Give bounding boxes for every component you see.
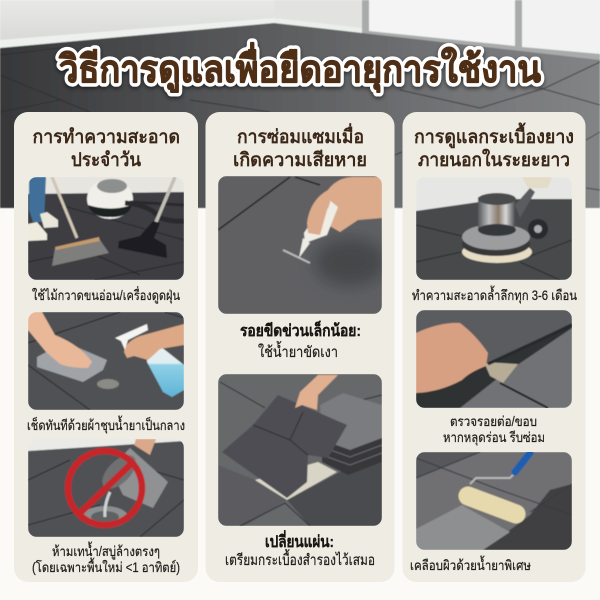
heading: long-term care: การดูแลกระเบื้องยาง: [414, 122, 574, 149]
photo: broom and vacuum: [28, 177, 184, 280]
caption: warning: (โดยเฉพาะพื้นใหม่ <1 อาทิตย์): [32, 557, 180, 575]
caption: scratches: ใช้น้ำยาขัดเงา: [258, 341, 338, 361]
heading: repair: เกิดความเสียหาย: [233, 149, 367, 171]
caption: warning: ห้ามเทน้ำ/สบู่ล้างตรงๆ: [52, 541, 160, 560]
heading: daily cleaning: [32, 127, 180, 171]
caption: coating: เคลือบผิวด้วยน้ำยาพิเศษ: [410, 555, 531, 573]
photo: floor polishing machine: [416, 177, 572, 280]
heading: daily cleaning: การทำความสะอาด: [32, 127, 180, 148]
heading: repair: [233, 123, 367, 171]
caption: wipe: เช็ดทันทีด้วยผ้าชุบน้ำยาเป็นกลาง: [27, 415, 185, 434]
panel: long-term care: [402, 112, 586, 582]
heading: long-term care: [414, 122, 574, 171]
caption: scratches: [240, 319, 361, 361]
panel: daily cleaning: [14, 112, 198, 582]
caption: replace: เตรียมกระเบื้องสำรองไว้เสมอ: [225, 549, 375, 569]
background photo: room with rubber floor: [0, 0, 600, 208]
heading: long-term care: ภายนอกในระยะยาว: [418, 148, 570, 171]
photo: coating with roller: [416, 452, 572, 550]
heading: daily cleaning: ประจำวัน: [71, 150, 141, 171]
caption: inspect seams: [443, 414, 545, 446]
caption: inspect seams: ตรวจรอยต่อ/ขอบ: [450, 414, 537, 429]
heading: repair: การซ่อมแซมเมื่อ: [237, 123, 364, 148]
title: วิธีการดูแลเพื่อยืดอายุการใช้งาน: [58, 42, 541, 93]
caption: inspect seams: หากหลุดร่อน รีบซ่อม: [443, 430, 545, 446]
photo: do not pour water: [28, 439, 184, 537]
caption: replace: เปลี่ยนแผ่น:: [265, 530, 334, 551]
photo: checking tile edge: [416, 310, 572, 408]
caption: warning: [32, 541, 180, 575]
title: วิธีการดูแลเพื่อยืดอายุการใช้งาน: [58, 42, 541, 93]
caption: scratches: รอยขีดข่วนเล็กน้อย:: [240, 319, 361, 340]
panel: repair: [206, 112, 394, 582]
photo: wiping with cloth and spray: [28, 312, 184, 410]
caption: replace: [225, 530, 375, 569]
photo: replacing tile: [218, 374, 382, 526]
photo: polish on scratch: [218, 176, 386, 314]
caption: broom: ใช้ไม้กวาดขนอ่อน/เครื่องดูดฝุ่น: [32, 286, 180, 304]
